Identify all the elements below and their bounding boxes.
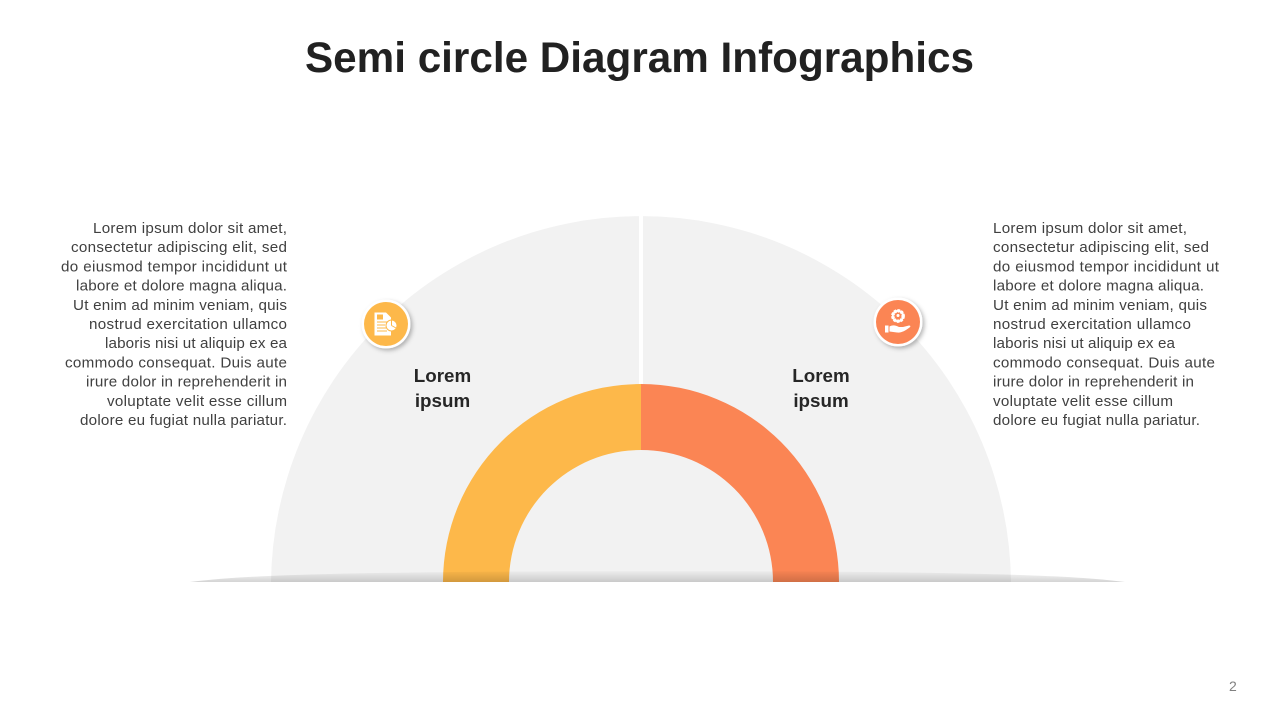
left text block: irure dolor in reprehenderit in	[86, 374, 287, 391]
right text block: Ut enim ad minim veniam, quis	[993, 297, 1207, 314]
right text block: irure dolor in reprehenderit in	[993, 374, 1194, 391]
left label	[414, 365, 471, 411]
left text block: Lorem ipsum dolor sit amet,	[93, 220, 287, 237]
right text block: labore et dolore magna aliqua.	[993, 278, 1204, 295]
page number: 2	[1229, 678, 1237, 694]
icon: document with pie chart	[362, 300, 410, 348]
right text block: do eiusmod tempor incididunt ut	[993, 258, 1220, 275]
left text block: consectetur adipiscing elit, sed	[71, 239, 287, 256]
right text block: Lorem ipsum dolor sit amet,	[993, 220, 1187, 237]
left label: ipsum	[415, 390, 470, 411]
ring segment: yellow	[443, 384, 641, 582]
left text block: nostrud exercitation ullamco	[89, 316, 287, 333]
left text block: laboris nisi ut aliquip ex ea	[105, 335, 288, 352]
ring segment: orange	[641, 384, 839, 582]
right text block	[993, 220, 1220, 429]
right text block: voluptate velit esse cillum	[993, 393, 1173, 410]
left text block: do eiusmod tempor incididunt ut	[61, 258, 288, 275]
right text block: nostrud exercitation ullamco	[993, 316, 1191, 333]
left text block: Ut enim ad minim veniam, quis	[73, 297, 287, 314]
left text block: commodo consequat. Duis aute	[65, 354, 287, 371]
left text block: labore et dolore magna aliqua.	[76, 278, 287, 295]
right text block: commodo consequat. Duis aute	[993, 354, 1215, 371]
right label: ipsum	[793, 390, 849, 411]
icon: hand holding gear	[874, 298, 922, 346]
right text block: laboris nisi ut aliquip ex ea	[993, 335, 1176, 352]
left label: Lorem	[414, 365, 471, 386]
base shadow	[190, 571, 1125, 582]
right text block: consectetur adipiscing elit, sed	[993, 239, 1209, 256]
right label	[792, 365, 850, 411]
right text block: dolore eu fugiat nulla pariatur.	[993, 412, 1200, 429]
panel: left grey quarter	[271, 216, 641, 582]
left text block	[61, 220, 288, 429]
left text block: dolore eu fugiat nulla pariatur.	[80, 412, 287, 429]
title: Semi circle Diagram Infographics	[305, 34, 974, 82]
right label: Lorem	[792, 365, 850, 386]
panel: right grey quarter	[641, 216, 1011, 582]
left text block: voluptate velit esse cillum	[107, 393, 287, 410]
